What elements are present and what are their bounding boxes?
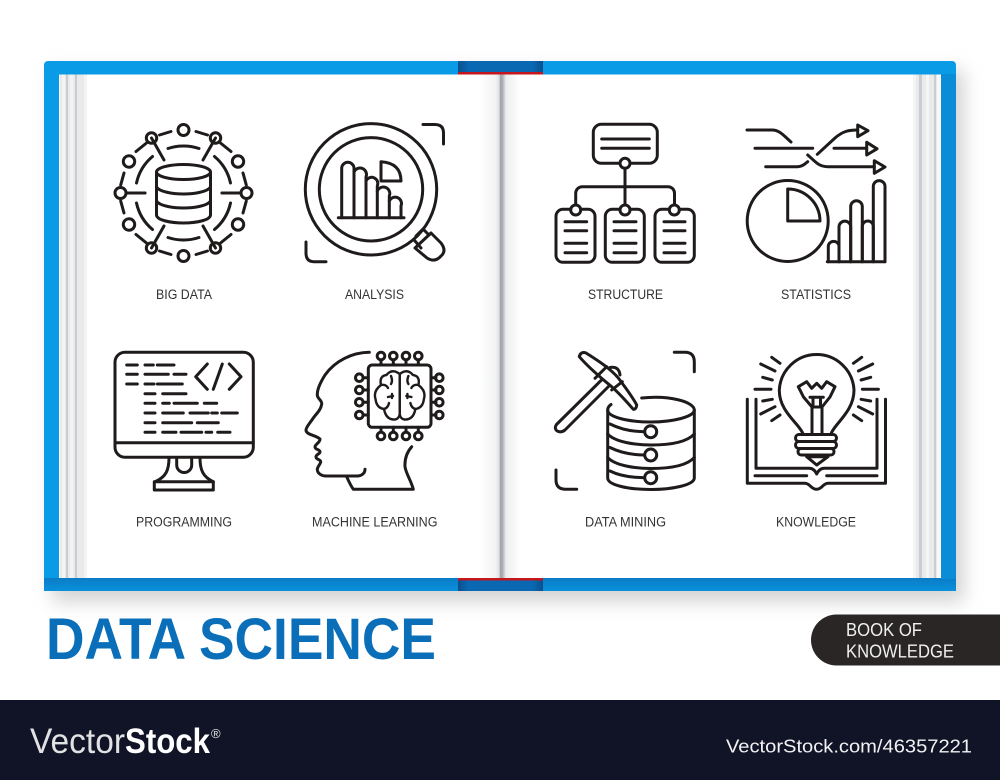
right page	[500, 74, 941, 578]
badge: book of knowledge: KNOWLEDGE	[846, 640, 954, 662]
footer image id: VectorStock.com/46357221	[726, 737, 972, 757]
icon: big data	[115, 124, 252, 262]
footer logo: VectorStock: ®	[211, 726, 221, 741]
label: structure: STRUCTURE	[588, 287, 663, 302]
title: DATA SCIENCE	[46, 607, 436, 672]
icon: knowledge bulb and book	[747, 355, 886, 489]
footer logo: VectorStock	[30, 722, 221, 761]
icon: analysis magnifier	[305, 124, 444, 262]
footer logo: VectorStock: Stock	[125, 722, 210, 761]
label: analysis: ANALYSIS	[345, 287, 404, 302]
book cover shadow	[52, 70, 964, 602]
book spine bottom	[458, 578, 543, 591]
icon: data mining	[555, 352, 694, 490]
footer logo: VectorStock: Vector	[30, 722, 125, 761]
footer bar	[0, 700, 1000, 780]
label: big data: BIG DATA	[156, 287, 212, 302]
label: data mining: DATA MINING	[585, 515, 666, 530]
label: programming: PROGRAMMING	[136, 515, 232, 530]
icon: programming monitor	[115, 352, 253, 490]
badge: book of knowledge: BOOK OF	[846, 619, 922, 640]
icon: statistics	[747, 125, 885, 262]
book cover	[44, 61, 956, 591]
badge: book of knowledge	[811, 614, 1000, 666]
label: knowledge: KNOWLEDGE	[776, 515, 856, 530]
left page	[59, 74, 500, 578]
label: statistics: STATISTICS	[781, 287, 851, 302]
book spine top	[458, 61, 543, 75]
label: machine learning: MACHINE LEARNING	[312, 515, 438, 530]
icon: structure hierarchy	[556, 124, 694, 262]
book centre fold	[480, 74, 520, 578]
icon: machine learning head	[306, 352, 443, 489]
